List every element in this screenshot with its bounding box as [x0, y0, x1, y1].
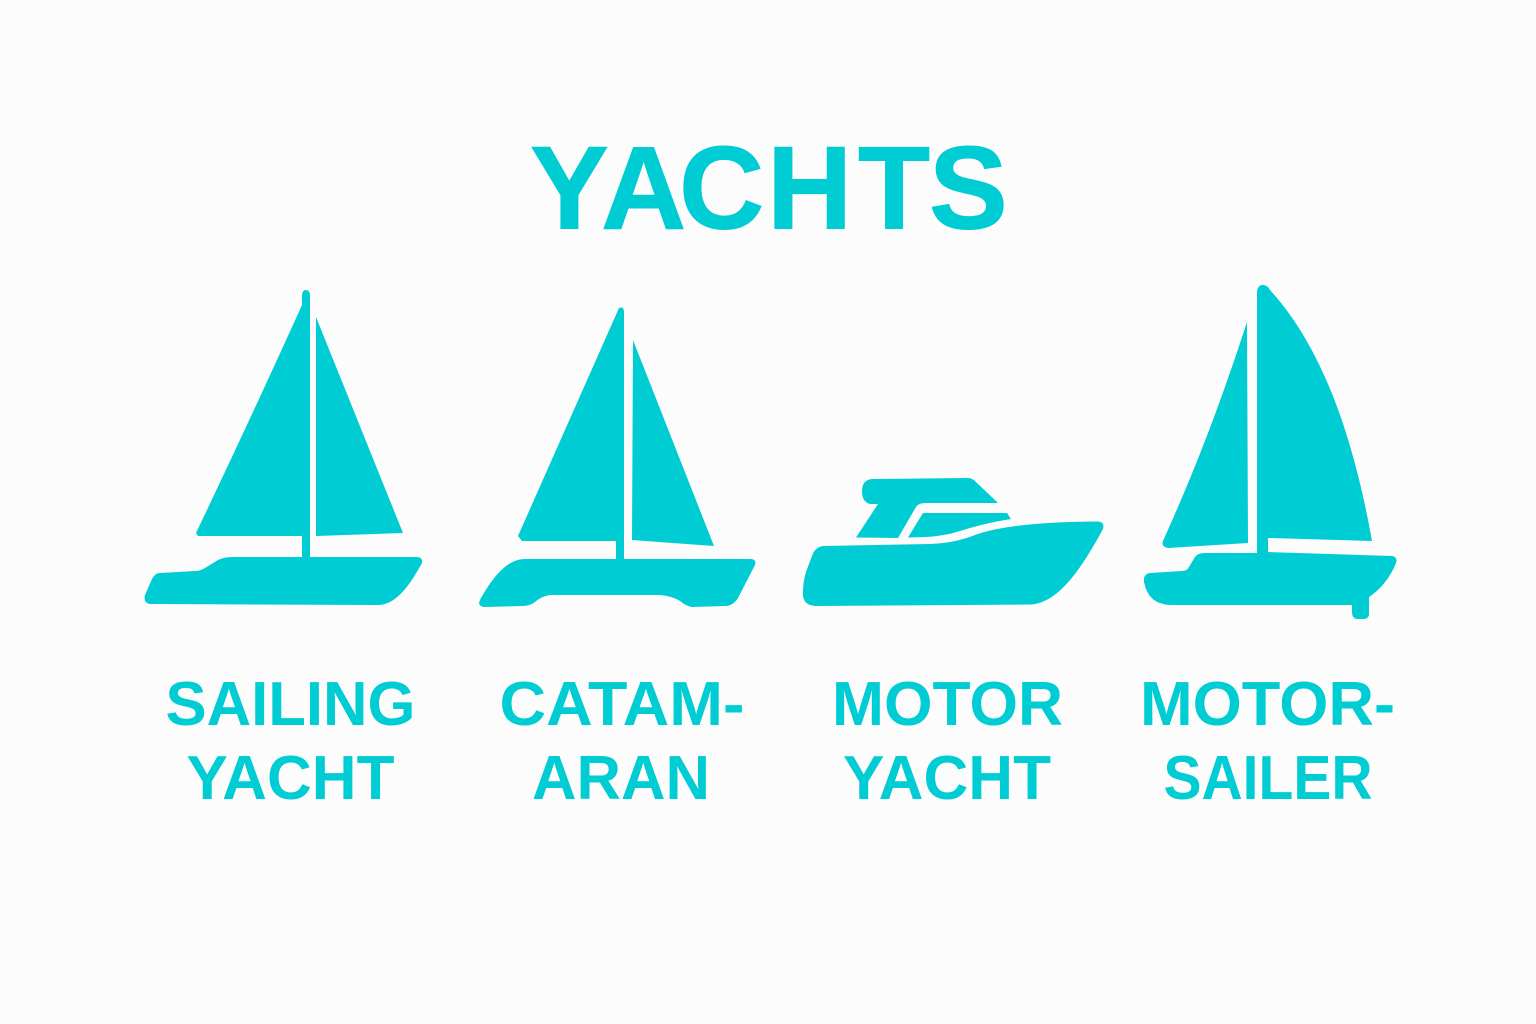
label: motor yacht: MOTOR	[832, 670, 1063, 739]
title: YACHTS	[530, 122, 1008, 254]
label: sailing yacht: SAILING	[166, 670, 416, 739]
label: motor yacht	[832, 670, 1063, 813]
icon: motor yacht	[803, 478, 1103, 606]
label: sailing yacht: YACHT	[186, 744, 395, 813]
label: motor-sailer: SAILER	[1164, 744, 1372, 813]
icon: catamaran	[479, 308, 755, 607]
label: motor-sailer	[1140, 670, 1395, 813]
label: motor yacht: YACHT	[843, 744, 1051, 813]
icon: sailing yacht	[145, 290, 422, 605]
label: catamaran: ARAN	[532, 744, 710, 813]
icon: motor-sailer	[1144, 285, 1396, 619]
label: catamaran: CATAM-	[500, 670, 744, 739]
label: motor-sailer: MOTOR-	[1140, 670, 1395, 739]
label: catamaran	[500, 670, 744, 813]
label: sailing yacht	[166, 670, 416, 813]
